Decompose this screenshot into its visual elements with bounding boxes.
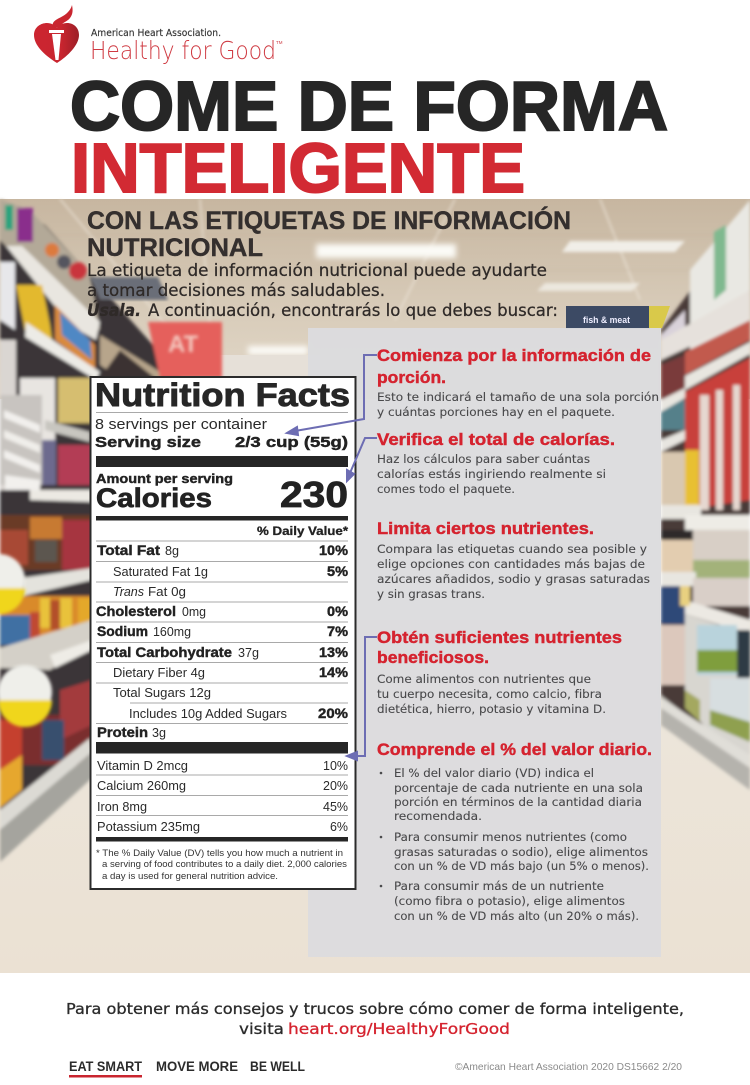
nutrient rows: 14% (319, 665, 348, 680)
left shelves (0, 199, 222, 862)
white footer band (0, 973, 750, 1085)
logo (34, 5, 283, 65)
right shelves (661, 200, 750, 790)
tip 1: serving information (377, 346, 659, 419)
footnote: a serving of food contributes to a daily diet. 2,000 calories (102, 859, 347, 870)
footer tagline: BE WELL (250, 1059, 305, 1074)
bullet list: porcentaje de cada nutriente en una sola (394, 781, 643, 795)
logo: TM (276, 40, 283, 45)
calories: 230 (280, 474, 348, 515)
tip 2: total calories: comes todo el paquete. (377, 482, 515, 496)
bullet list (380, 766, 649, 923)
bullet list: El % del valor diario (VD) indica el (394, 766, 594, 780)
nutrient rows: 7% (327, 624, 348, 639)
servings: Serving size (95, 434, 201, 451)
tip 5: daily value (377, 740, 652, 923)
footer call to action: Para obtener más consejos y trucos sobre cómo comer de forma inteligente, (66, 1000, 684, 1018)
nutrient rows: 20% (318, 706, 348, 721)
footnote: a day is used for general nutrition advice. (102, 871, 278, 882)
ceiling (0, 199, 750, 399)
intro text: A continuación, encontrarás lo que debes buscar: (148, 301, 558, 320)
nutrient rows: Sodium (97, 624, 148, 639)
bullet list: porción en términos de la cantidad diaria (394, 795, 642, 809)
vitamins and minerals: Iron 8mg (97, 799, 147, 814)
panel: nutrition facts label (90, 377, 356, 889)
subtitle: CON LAS ETIQUETAS DE INFORMACIÓN (87, 205, 571, 235)
intro text: a tomar decisiones más saludables. (87, 281, 385, 300)
servings: 2/3 cup (55g) (235, 434, 348, 451)
tip 1: serving information: porción. (377, 368, 446, 387)
tip 2: total calories (377, 430, 615, 496)
footer call to action: visita (239, 1020, 284, 1038)
arrow: total calories to calories (347, 438, 377, 481)
footer tagline: EAT SMART (69, 1059, 143, 1074)
vitamins and minerals (96, 758, 348, 834)
footer call to action (66, 1000, 684, 1038)
intro text: La etiqueta de información nutricional puede ayudarte (87, 261, 547, 280)
floor (0, 620, 750, 973)
tip 4: beneficial nutrients: Come alimentos con nutrientes que (377, 672, 591, 686)
baking sign (90, 277, 168, 300)
vitamins and minerals: 6% (330, 819, 348, 834)
tip 2: total calories: Haz los cálculos para saber cuántas (377, 452, 590, 466)
bullet list: Para consumir más de un nutriente (394, 879, 604, 893)
nutrient rows: 3g (152, 725, 166, 740)
vitamins and minerals: 10% (323, 758, 348, 773)
nutrient rows (96, 543, 348, 740)
nutrient rows: 10% (319, 543, 348, 558)
tip 3: limit nutrients: elige opciones con cantidades más bajas de (377, 557, 645, 571)
nutrient rows: 5% (327, 564, 348, 579)
label heading: Nutrition Facts (95, 377, 350, 413)
nutrient rows: 37g (238, 645, 259, 660)
arrow: beneficial nutrients to vitamins (347, 637, 377, 760)
servings: 8 servings per container (95, 417, 267, 433)
nutrient rows: Dietary Fiber 4g (113, 665, 205, 680)
tip 1: serving information: y cuántas porciones hay en el paquete. (377, 405, 615, 419)
bullet list: (como fibra o potasio), elige alimentos (394, 894, 625, 908)
fish and meat sign (566, 306, 670, 329)
nutrient rows: 0mg (182, 604, 206, 619)
tip 4: beneficial nutrients: dietética, hierro, potasio y vitamina D. (377, 702, 606, 716)
title: INTELIGENTE (71, 129, 525, 207)
title (70, 67, 668, 207)
tip 3: limit nutrients: Limita ciertos nutrientes. (377, 519, 594, 538)
nutrient rows: 160mg (153, 624, 191, 639)
nutrient rows: 0% (327, 604, 348, 619)
fish and meat sign: fish & meat (583, 315, 631, 326)
organization name: American Heart Association. (91, 28, 221, 39)
icon: heart and torch (34, 5, 79, 63)
nutrient rows: Includes 10g Added Sugars (129, 706, 287, 721)
tip 2: total calories: calorías estás ingiriendo realmente si (377, 467, 606, 481)
bullet list: grasas saturadas o sodio), elige alimentos (394, 845, 648, 859)
bullet list: Para consumir menos nutrientes (como (394, 830, 627, 844)
subtitle (87, 205, 571, 262)
footnote (96, 848, 347, 882)
copyright: ©American Heart Association 2020 DS15662 2/20 (455, 1061, 682, 1073)
footer call to action: heart.org/HealthyForGood (288, 1020, 510, 1038)
arrow: serving information to serving size (287, 355, 377, 435)
nutrient rows: Protein (97, 725, 148, 740)
nutrient rows: Total Sugars 12g (113, 685, 211, 700)
nutrient rows: Total Carbohydrate (97, 645, 233, 660)
nutrient rows: Fat 0g (148, 584, 186, 599)
tip 4: beneficial nutrients: beneficiosos. (377, 648, 489, 667)
vitamins and minerals: Potassium 235mg (97, 819, 200, 834)
vitamins and minerals: 45% (323, 799, 348, 814)
bullet list: recomendada. (394, 809, 482, 823)
intro text: Úsala. (87, 301, 141, 320)
calories: Amount per serving (96, 472, 233, 486)
vitamins and minerals: Vitamin D 2mcg (97, 758, 188, 773)
tip 2: total calories: Verifica el total de calorías. (377, 430, 615, 449)
background photo: supermarket aisle (0, 199, 750, 973)
tip 4: beneficial nutrients: tu cuerpo necesita, como calcio, fibra (377, 687, 602, 701)
tip 4: beneficial nutrients: Obtén suficientes nutrientes (377, 628, 622, 647)
nutrient rows: Cholesterol (96, 604, 176, 619)
title: COME DE FORMA (70, 67, 668, 145)
red promotional sign lettering: AT (168, 331, 199, 358)
calories: Calories (96, 483, 212, 513)
nutrient rows: Total Fat (97, 543, 161, 558)
back wall (200, 355, 320, 625)
panel: tips background (308, 328, 661, 957)
vitamins and minerals: 20% (323, 778, 348, 793)
nutrient rows: 13% (319, 645, 348, 660)
tip 3: limit nutrients: y sin grasas trans. (377, 587, 485, 601)
nutrient rows: Trans (113, 584, 145, 599)
tip 3: limit nutrients (377, 519, 650, 601)
footer tagline: MOVE MORE (156, 1059, 238, 1074)
panel: nutrition facts label: % Daily Value* (257, 526, 349, 538)
vitamins and minerals: Calcium 260mg (97, 778, 186, 793)
tip 1: serving information: Comienza por la información de (377, 346, 651, 365)
subtitle: NUTRICIONAL (87, 234, 263, 262)
footer tagline (69, 1059, 305, 1078)
tip 1: serving information: Esto te indicará el tamaño de una sola porción (377, 390, 659, 404)
intro text (87, 261, 558, 320)
bullet list: con un % de VD más bajo (un 5% o menos). (394, 859, 649, 873)
tip 3: limit nutrients: azúcares añadidos, sodio y grasas saturadas (377, 572, 650, 586)
brand name: Healthy for Good (90, 36, 276, 65)
tip 5: daily value: Comprende el % del valor diario. (377, 740, 652, 759)
sign discs on shelf (0, 554, 52, 727)
servings (95, 417, 348, 451)
nutrient rows: 8g (165, 543, 179, 558)
calories (96, 472, 348, 515)
footnote: * The % Daily Value (DV) tells you how much a nutrient in (96, 848, 343, 859)
bullet list: con un % de VD más alto (un 20% o más). (394, 909, 639, 923)
nutrient rows: Saturated Fat 1g (113, 564, 208, 579)
tip 3: limit nutrients: Compara las etiquetas cuando sea posible y (377, 542, 647, 556)
tip 4: beneficial nutrients (377, 628, 622, 716)
